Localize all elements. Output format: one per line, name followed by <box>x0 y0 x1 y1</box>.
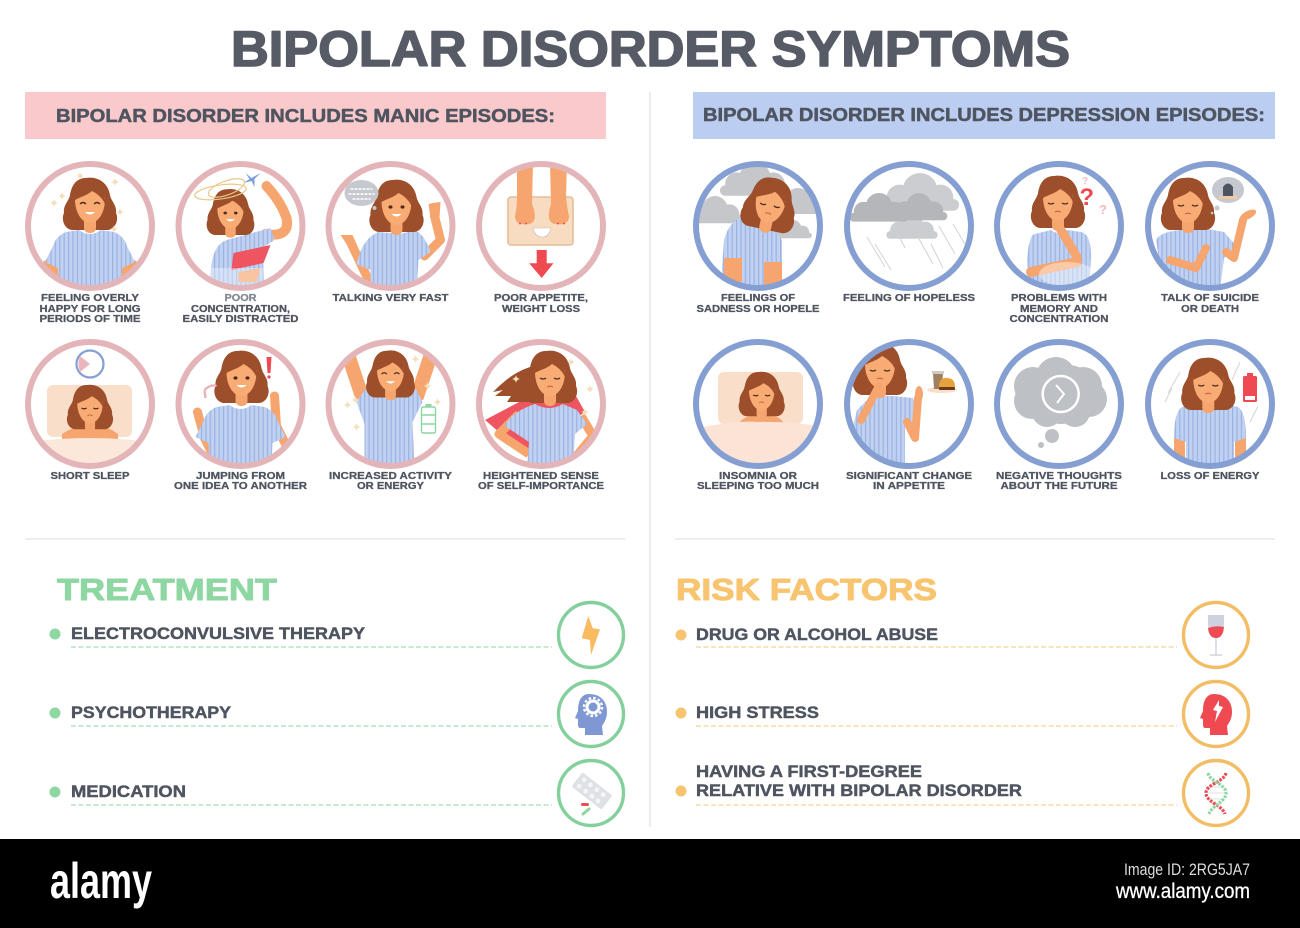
icon: rain clouds <box>847 164 971 288</box>
label <box>1010 292 1108 325</box>
label: SIGNIFICANT CHANGE <box>846 470 972 482</box>
panel: manic banner <box>25 92 606 139</box>
panel: feelings of sadness <box>687 162 825 315</box>
label: ABOUT THE FUTURE <box>1000 480 1118 492</box>
panel: poor concentration <box>178 164 302 325</box>
label <box>846 470 972 492</box>
panel: talking very fast <box>328 164 452 304</box>
icon: feet on scale with down arrow <box>479 164 603 288</box>
title: BIPOLAR DISORDER SYMPTOMS <box>231 21 1070 77</box>
panel: manic banner: BIPOLAR DISORDER INCLUDES MANIC EPISODES: <box>56 106 555 126</box>
panel: loss of energy <box>1148 342 1272 482</box>
label <box>996 470 1122 492</box>
label <box>697 470 819 492</box>
risk item: high stress: HIGH STRESS <box>696 704 819 722</box>
treatment item: medication <box>50 760 624 826</box>
label: FEELING OVERLY <box>41 292 139 304</box>
label <box>329 470 452 492</box>
label: ONE IDEA TO ANOTHER <box>174 480 307 492</box>
label: NEGATIVE THOUGHTS <box>996 470 1122 482</box>
risk item: drug or alcohol abuse <box>676 602 1248 668</box>
icon: thinking woman with question marks: ? <box>1099 202 1107 217</box>
treatment item: electroconvulsive therapy: ELECTROCONVULSIVE THERAPY <box>71 625 365 643</box>
label <box>478 470 604 492</box>
label: WEIGHT LOSS <box>502 303 580 315</box>
watermark footer bar: www.alamy.com <box>1115 880 1250 903</box>
label: HAPPY FOR LONG <box>40 303 140 315</box>
watermark footer bar: Image ID: 2RG5JA7 <box>1124 860 1250 879</box>
panel: negative thoughts <box>996 342 1122 492</box>
icon: woman with cape <box>479 342 603 468</box>
panel: increased activity <box>328 342 452 492</box>
icon: thought cloud with clock <box>997 342 1121 466</box>
panel: feeling of hopeless <box>843 164 975 304</box>
panel: feeling overly happy <box>28 164 152 325</box>
label: INSOMNIA OR <box>719 470 797 482</box>
icon: talking woman with speech bubble <box>328 164 452 290</box>
treatment item: psychotherapy: PSYCHOTHERAPY <box>71 704 231 722</box>
icon: happy woman <box>28 164 152 290</box>
label: SHORT SLEEP <box>50 470 130 482</box>
label: HEIGHTENED SENSE <box>483 470 599 482</box>
label <box>174 470 307 492</box>
label <box>40 292 140 325</box>
heading: risk factors: RISK FACTORS <box>676 572 937 607</box>
panel: depression banner <box>693 92 1275 139</box>
icon: woman in bed <box>696 342 820 474</box>
panel: depression banner: BIPOLAR DISORDER INCLUDES DEPRESSION EPISODES: <box>703 105 1265 125</box>
panel: change in appetite <box>846 342 972 492</box>
panel: memory problems <box>997 164 1121 325</box>
panel: talk of suicide <box>1148 164 1272 315</box>
label: OR DEATH <box>1181 303 1239 315</box>
icon: distracted woman with book <box>178 164 302 290</box>
icon: sad woman under clouds <box>687 162 825 290</box>
icon: woman pointing with exclamation <box>178 342 302 466</box>
icon: thinking woman with question marks: ? <box>1079 184 1094 211</box>
risk item: first-degree relative <box>676 760 1248 826</box>
risk item: first-degree relative: RELATIVE WITH BIPOLAR DISORDER <box>696 782 1022 800</box>
icon: woman with tombstone thought <box>1148 164 1272 290</box>
label: CONCENTRATION <box>1010 313 1108 325</box>
label: PERIODS OF TIME <box>40 313 140 325</box>
label <box>494 292 588 315</box>
label: POOR APPETITE, <box>494 292 588 304</box>
risk item: high stress <box>676 682 1248 746</box>
label: EASILY DISTRACTED <box>182 313 299 325</box>
icon: thinking woman with question marks <box>997 164 1121 290</box>
icon: woman refusing food <box>847 342 971 468</box>
watermark footer bar <box>0 839 1300 928</box>
heading: treatment: TREATMENT <box>57 572 277 607</box>
icon: woman with raised arms and battery <box>328 342 452 468</box>
label: JUMPING FROM <box>196 470 285 482</box>
label: PROBLEMS WITH <box>1011 292 1107 304</box>
label: MEMORY AND <box>1020 303 1098 315</box>
label <box>696 292 820 315</box>
icon: tired woman with low battery <box>1148 342 1272 468</box>
treatment item: psychotherapy <box>50 682 624 746</box>
label: TALK OF SUICIDE <box>1161 292 1259 304</box>
panel: jumping from one idea <box>174 342 307 492</box>
icon: thinking woman with question marks: ? <box>1082 176 1088 187</box>
risk item: first-degree relative: HAVING A FIRST-DEGREE <box>696 763 922 781</box>
watermark footer bar: alamy <box>50 853 152 909</box>
label: SADNESS OR HOPELE <box>696 303 820 315</box>
panel: short sleep <box>28 342 152 482</box>
label <box>182 292 299 325</box>
label: FEELING OF HOPELESS <box>843 292 975 304</box>
panel: insomnia <box>696 342 820 492</box>
label: POOR <box>224 292 257 304</box>
panel: heightened self-importance <box>478 342 604 492</box>
label: OR ENERGY <box>357 480 424 492</box>
label: IN APPETITE <box>873 480 945 492</box>
panel: poor appetite <box>479 164 603 315</box>
risk item: drug or alcohol abuse: DRUG OR ALCOHOL ABUSE <box>696 626 938 644</box>
label: CONCENTRATION, <box>191 303 290 315</box>
label: TALKING VERY FAST <box>332 292 449 304</box>
treatment item: medication: MEDICATION <box>71 783 186 801</box>
label: LOSS OF ENERGY <box>1160 470 1260 482</box>
icon: sleeping woman with clock <box>28 342 152 474</box>
label: SLEEPING TOO MUCH <box>697 480 819 492</box>
label: INCREASED ACTIVITY <box>329 470 452 482</box>
label <box>1161 292 1259 315</box>
label: FEELINGS OF <box>721 292 796 304</box>
treatment item: electroconvulsive therapy <box>50 602 624 668</box>
label: OF SELF-IMPORTANCE <box>478 480 604 492</box>
